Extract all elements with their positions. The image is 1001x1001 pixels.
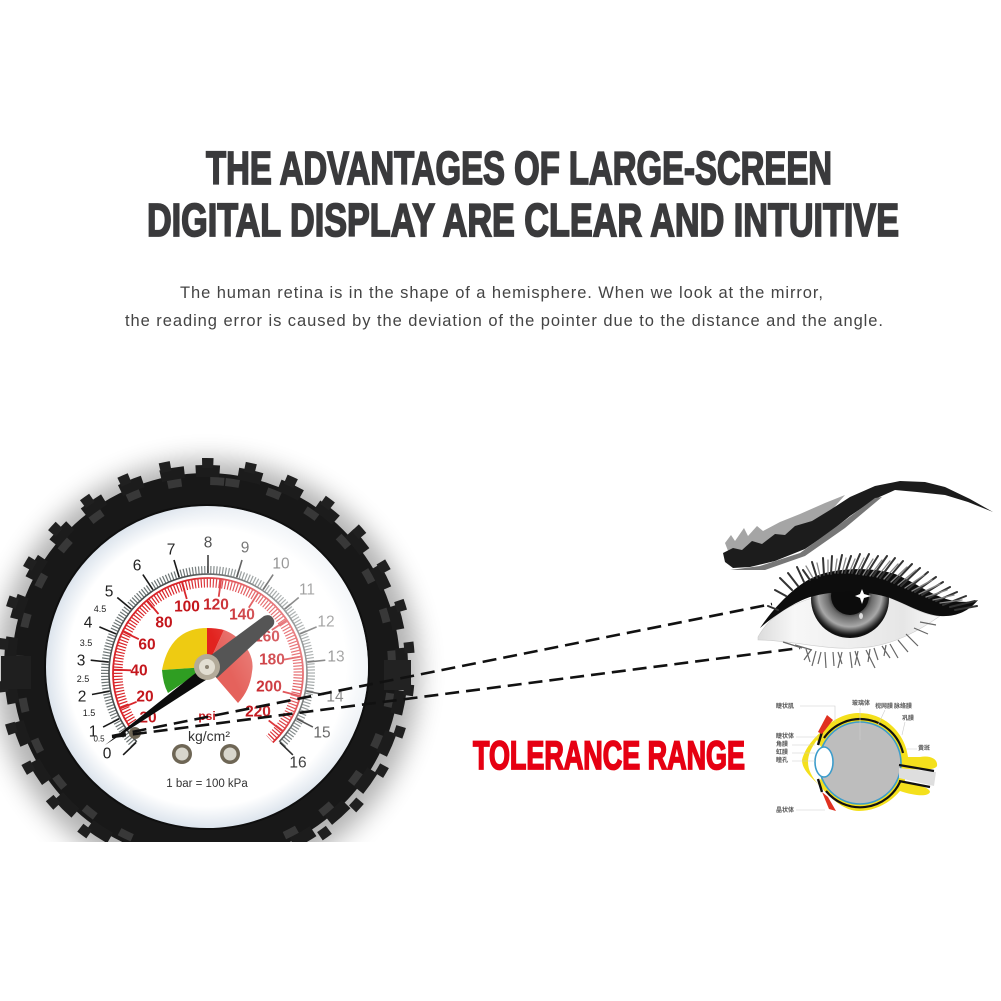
- label leader lines: [792, 706, 917, 810]
- kg/cm2 numbers: 9: [241, 540, 249, 556]
- upper lashes: [768, 554, 977, 610]
- kg/cm2 numbers: 4.5: [94, 604, 106, 614]
- anatomy labels: 晶状体: [776, 806, 794, 814]
- psi numbers: 60: [138, 636, 156, 654]
- psi numbers: 100: [174, 598, 200, 616]
- psi numbers: 120: [203, 596, 229, 614]
- psi numbers: 220: [245, 704, 271, 720]
- anatomy labels: 脉络膜: [894, 702, 912, 710]
- kg/cm2 numbers: 15: [313, 724, 331, 742]
- sclera: [758, 598, 940, 648]
- kg/cm2 numbers: 11: [299, 582, 315, 598]
- kg/cm2 numbers: 6: [133, 558, 141, 574]
- iris and pupil: [811, 592, 889, 638]
- rubber guard with teeth: [0, 459, 414, 875]
- psi numbers: psi: [198, 709, 216, 723]
- upper lid: [760, 569, 978, 628]
- glass glare: [173, 506, 368, 789]
- kg/cm2 numbers: 10: [272, 556, 290, 572]
- tolerance range label: TOLERANCE RANGE: [473, 734, 745, 778]
- kg/cm2 numbers: 16: [289, 754, 307, 772]
- eye illustration: [723, 481, 993, 668]
- kg/cm2 numbers: 2: [78, 688, 86, 706]
- kg/cm2 numbers: 2.5: [77, 674, 89, 684]
- kg/cm2 numbers: 1.5: [83, 708, 95, 718]
- kg/cm2 numbers: 5: [105, 584, 113, 600]
- description text: [125, 284, 883, 330]
- unit labels: [167, 731, 248, 787]
- psi numbers: 140: [229, 606, 255, 624]
- kg/cm2 scale ticks: [91, 555, 325, 755]
- kg/cm2 numbers: 0.5: [93, 734, 105, 744]
- anatomy labels: 瞳孔: [776, 756, 788, 764]
- pressure gauge: [0, 459, 419, 884]
- psi numbers: 20: [139, 710, 157, 726]
- dial face: [45, 505, 369, 829]
- anatomy labels: 玻璃体: [852, 699, 870, 707]
- dial screws: [129, 727, 240, 764]
- description text: the reading error is caused by the deviation of the pointer due to the distance and the angle.: [125, 312, 883, 330]
- eyebrow: [723, 481, 993, 570]
- psi numbers: 20: [136, 688, 154, 706]
- anatomy labels: 睫状肌: [776, 702, 794, 710]
- psi numbers: 180: [259, 652, 285, 668]
- kg/cm2 numbers: 7: [167, 542, 175, 558]
- anatomy labels: [776, 699, 930, 814]
- kg/cm2 numbers: 14: [326, 688, 344, 706]
- kg/cm2 numbers: 0: [103, 746, 112, 762]
- eyeball: [808, 719, 903, 807]
- description text: The human retina is in the shape of a hemisphere. When we look at the mirror,: [180, 284, 823, 302]
- psi numbers: 200: [256, 678, 282, 696]
- anatomy labels: 视网膜: [875, 702, 893, 710]
- optic nerve: [899, 765, 936, 787]
- anatomy labels: 黄斑: [918, 744, 930, 752]
- kg/cm2 numbers: 13: [327, 648, 345, 666]
- colour zone wedge: [162, 628, 253, 703]
- psi numbers: 40: [130, 662, 148, 680]
- kg/cm2 numbers: 3.5: [80, 638, 92, 648]
- needle: [105, 615, 274, 745]
- kg/cm2 numbers: 12: [317, 614, 335, 630]
- sclera outline yellow: [802, 713, 937, 811]
- anatomy labels: 角膜: [776, 740, 788, 748]
- secondary lashes: [806, 558, 962, 603]
- anatomy labels: 巩膜: [902, 714, 914, 722]
- kg/cm2 numbers: 1: [89, 724, 97, 740]
- psi scale ticks: [113, 578, 303, 742]
- kg/cm2 numbers: 3: [77, 652, 85, 670]
- lower lashes: [783, 622, 936, 668]
- psi numbers: 160: [254, 628, 280, 646]
- eye highlights: [855, 589, 871, 619]
- anatomy labels: 虹膜: [776, 748, 788, 756]
- anatomy labels: 睫状体: [776, 732, 794, 740]
- kg/cm2 numbers: 4: [84, 614, 93, 632]
- unit labels: 1 bar = 100 kPa: [166, 778, 248, 790]
- dashed sight lines: [112, 604, 800, 737]
- infographic canvas: [0, 150, 993, 842]
- eye anatomy diagram: [776, 699, 937, 814]
- eye muscles: [818, 715, 836, 811]
- unit labels: kg/cm²: [188, 728, 230, 744]
- kg/cm2 numbers: 8: [204, 534, 212, 552]
- kg/cm2 numbers: [77, 534, 345, 772]
- title: [147, 142, 899, 246]
- psi numbers: 80: [155, 614, 173, 632]
- psi numbers: [130, 596, 285, 726]
